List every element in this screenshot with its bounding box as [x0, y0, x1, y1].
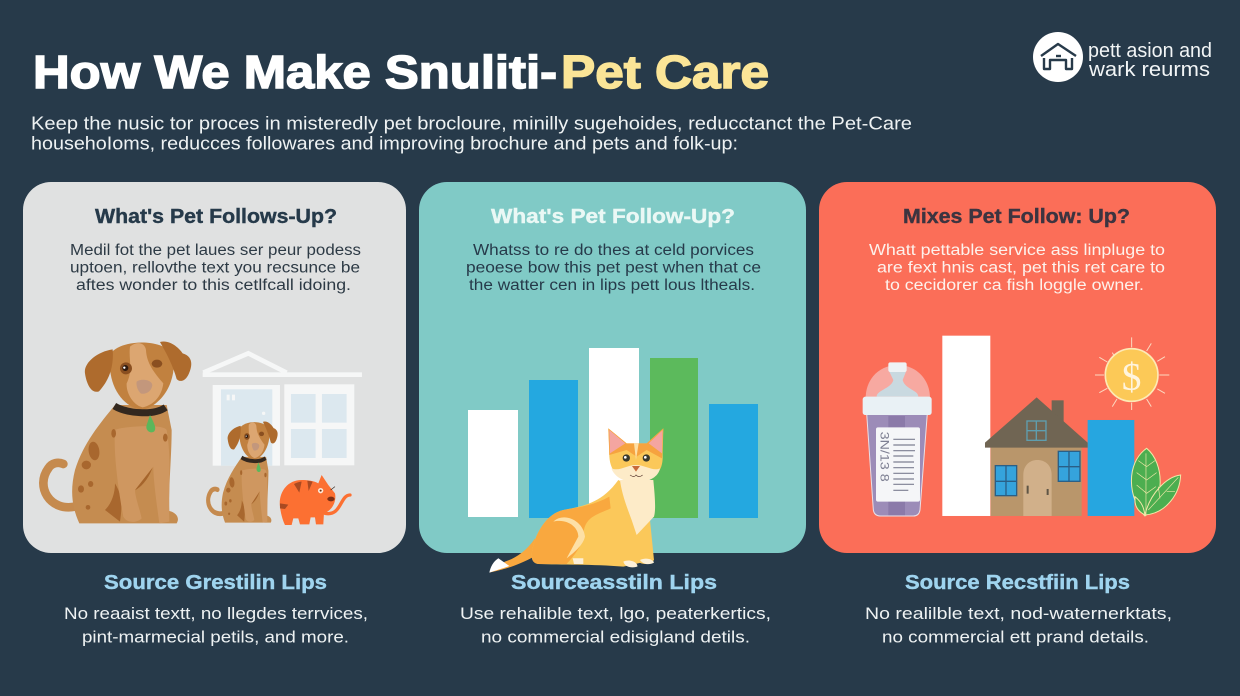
panel heading: What's Pet Follow-Up?	[491, 206, 735, 228]
title: Pet Care	[561, 46, 769, 98]
panel body text: to cecidorer ca fish loggle owner.	[885, 277, 1144, 294]
caption: right	[865, 572, 1172, 646]
white bar	[942, 336, 990, 516]
caption: left: Source Grestilin Lips	[104, 572, 327, 594]
icon: sitting cat	[489, 428, 663, 573]
title: How We Make Snuliti-	[33, 46, 557, 98]
caption: right: No realilble text, nod-waternerktats,	[865, 605, 1172, 623]
caption: centre: Sourceasstiln Lips	[511, 572, 717, 594]
icon: coin sun: $	[1122, 354, 1141, 398]
caption: left	[64, 572, 368, 646]
logo	[1033, 32, 1212, 82]
icon: big dog	[43, 342, 191, 523]
panel body text: uptoen, rellovthe text you recsunce be	[70, 260, 360, 276]
icon: coin sun	[1095, 337, 1169, 410]
logo: pett asion and	[1088, 40, 1212, 62]
caption: left: No reaaist textt, no llegdes terrvices,	[64, 605, 368, 623]
intro text	[31, 114, 912, 154]
panel body text: are fext hnis cast, pet this ret care to	[877, 260, 1165, 276]
icon: pet bottle: 3N/13 8	[878, 432, 892, 482]
bar chart	[468, 348, 758, 518]
panel: teal chart card	[419, 182, 806, 553]
illustration: dogs, cat and house	[43, 342, 362, 525]
panel body text	[70, 242, 361, 294]
icon: pet bottle	[863, 362, 932, 516]
panel body text: Whatss to re do thes at celd porvices	[473, 242, 754, 259]
icon: house	[985, 397, 1088, 516]
icon: small dog	[208, 422, 278, 523]
caption: centre	[460, 572, 771, 646]
panel: grey pets card	[23, 182, 406, 553]
panel body text: aftes wonder to this cetlfcall idoing.	[76, 277, 351, 294]
caption: left: pint-marmecial petils, and more.	[82, 628, 349, 646]
intro text: Keep the nusic tor proces in misteredly pet brocloure, minilly sugehoides, reducctanct the Pet-Care	[31, 114, 912, 134]
icon: leaves	[1131, 448, 1181, 516]
panel body text	[466, 242, 761, 294]
blue bar	[1088, 420, 1134, 516]
illustration: bottle, bars, house, coin and leaves	[863, 336, 1181, 516]
caption: centre: no commercial edisigland detils.	[481, 628, 750, 646]
panel heading: What's Pet Follows-Up?	[95, 206, 337, 228]
intro text: househoIoms, reducces followares and improving brochure and pets and folk-up:	[31, 134, 738, 154]
caption: right: Source Recstfiin Lips	[905, 572, 1130, 594]
panel body text: Medil fot the pet laues ser peur podess	[70, 242, 361, 259]
caption: centre: Use rehalible text, lgo, peaterkertics,	[460, 605, 771, 623]
icon: orange cat	[280, 475, 350, 525]
logo: wark reurms	[1088, 59, 1210, 81]
panel body text: the watter cen in lips pett lous ltheals.	[469, 277, 755, 294]
caption: right: no commercial ett prand details.	[882, 628, 1149, 646]
title	[33, 46, 769, 98]
panel body text: peoese bow this pet pest when that ce	[466, 260, 761, 276]
panel body text: Whatt pettable service ass linpluge to	[869, 242, 1165, 259]
panel body text	[869, 242, 1165, 294]
icon: house	[203, 353, 362, 466]
panel: coral card	[819, 182, 1216, 553]
panel heading: Mixes Pet Follow: Up?	[903, 206, 1130, 228]
